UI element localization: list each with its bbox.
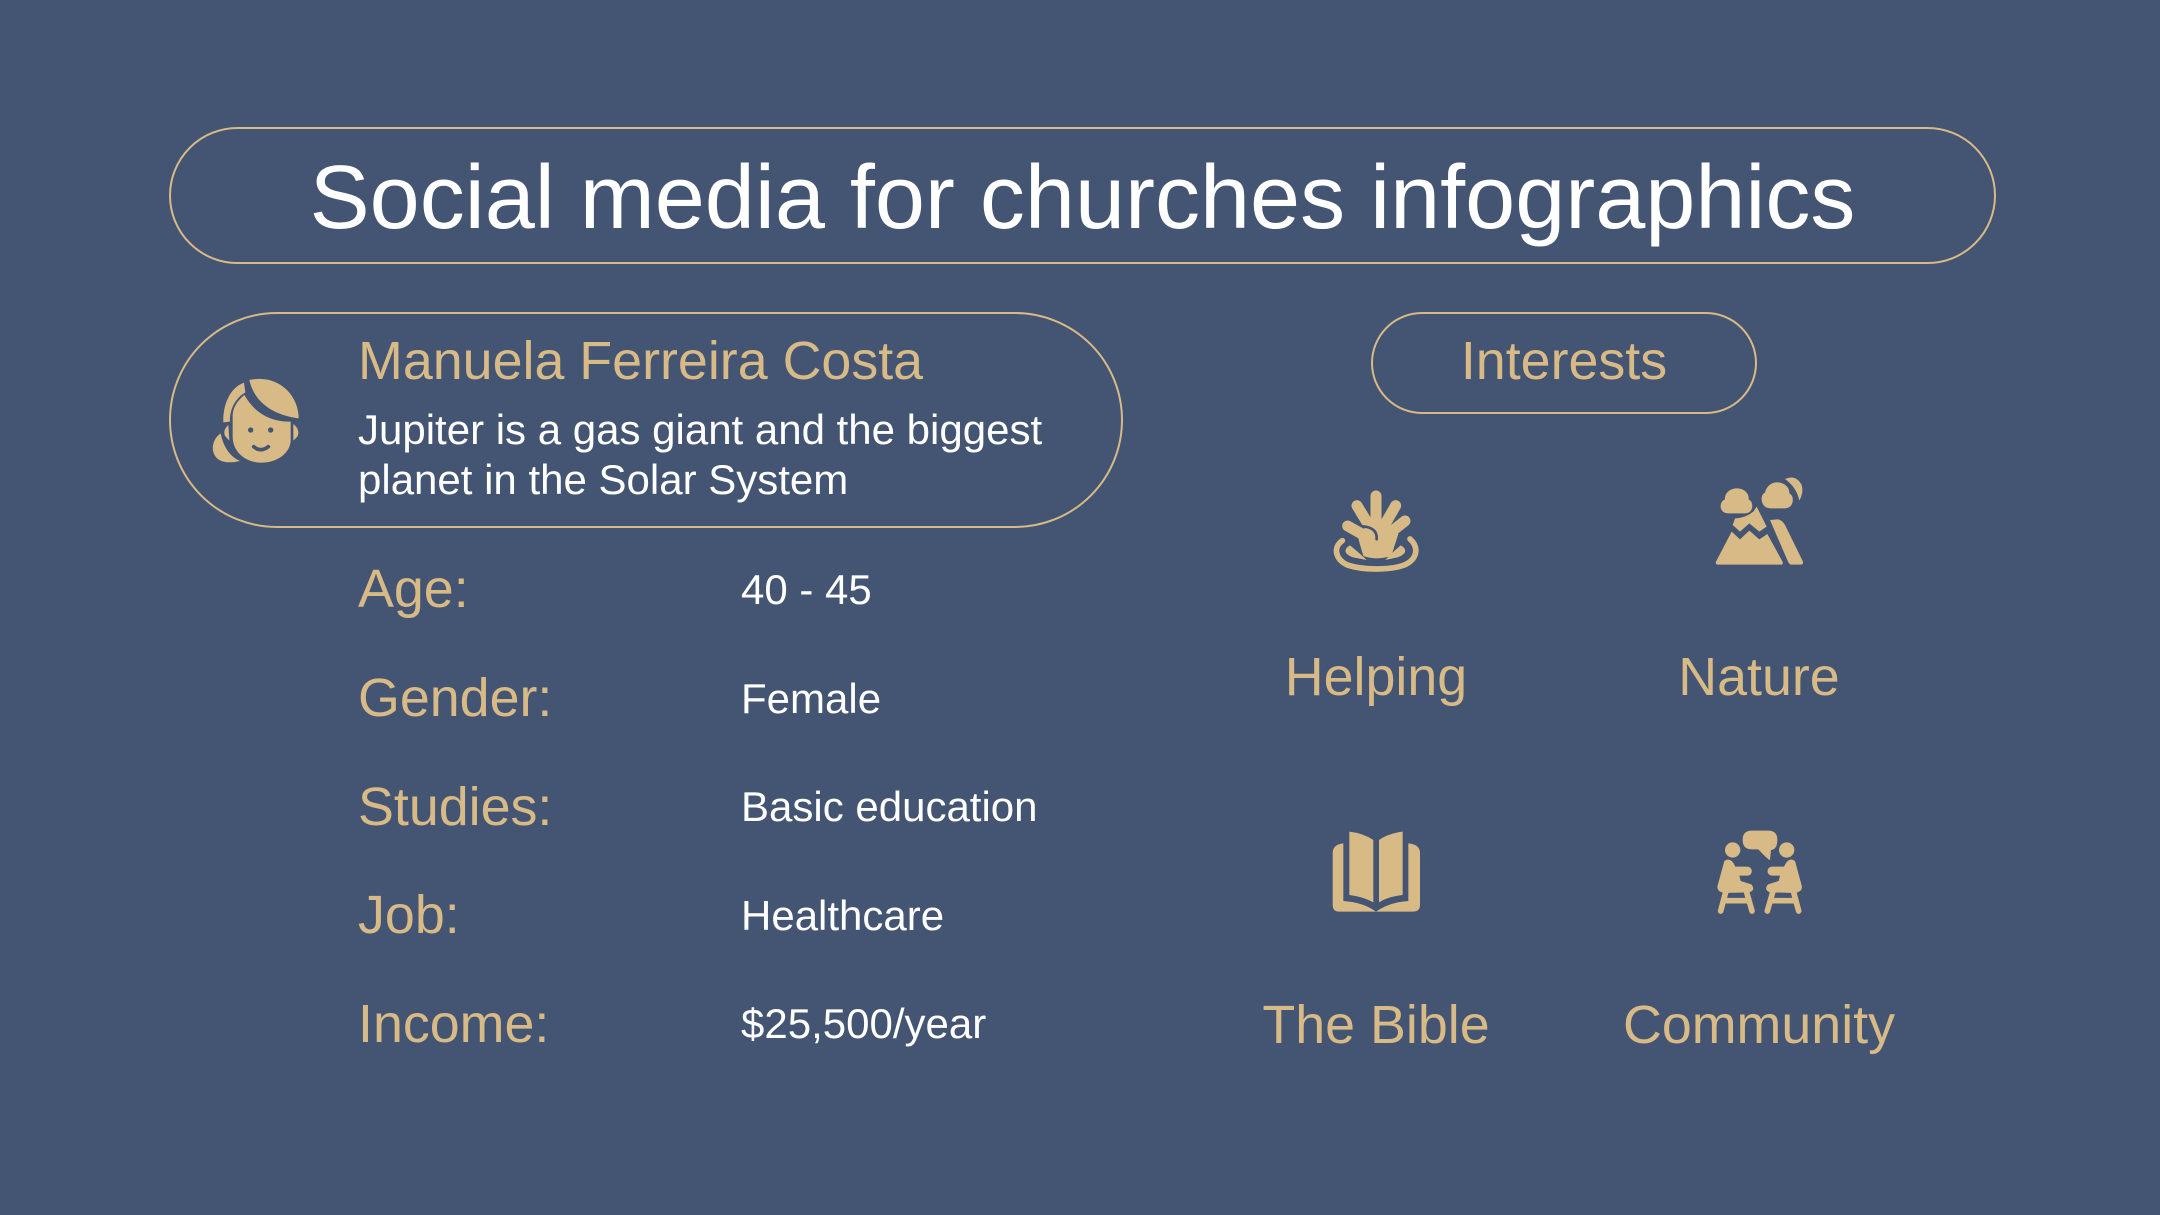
panel: profile header — [169, 312, 1123, 528]
studies: Studies: — [358, 777, 552, 837]
icon: open bible — [1332, 832, 1420, 912]
profile description — [358, 406, 1042, 503]
panel: demographics table — [358, 559, 1038, 1054]
gender: Gender: — [358, 668, 552, 728]
age value: 40 - 45 — [741, 566, 872, 613]
title text: Social media for churches infographics — [310, 148, 1855, 248]
interests heading text: Interests — [1461, 331, 1667, 391]
income value: $25,500/year — [741, 1000, 986, 1047]
gender value: Female — [741, 675, 881, 722]
icon: helping hand — [1334, 490, 1419, 572]
icon: community conversation — [1717, 830, 1802, 914]
job value: Healthcare — [741, 892, 944, 939]
age: Age: — [358, 559, 469, 619]
profile description: Jupiter is a gas giant and the biggest — [358, 406, 1042, 453]
the bible label: The Bible — [1262, 995, 1490, 1055]
icon: woman face — [212, 378, 299, 463]
profile name: Manuela Ferreira Costa — [358, 331, 923, 391]
income: Income: — [358, 994, 549, 1054]
profile description: planet in the Solar System — [358, 456, 848, 503]
nature label: Nature — [1678, 647, 1840, 707]
studies value: Basic education — [741, 783, 1038, 830]
title — [169, 127, 1996, 264]
community label: Community — [1623, 995, 1895, 1055]
helping label: Helping — [1285, 647, 1467, 707]
icon: nature mountain — [1716, 478, 1803, 565]
job: Job: — [358, 885, 460, 945]
interests heading — [1371, 312, 1757, 414]
